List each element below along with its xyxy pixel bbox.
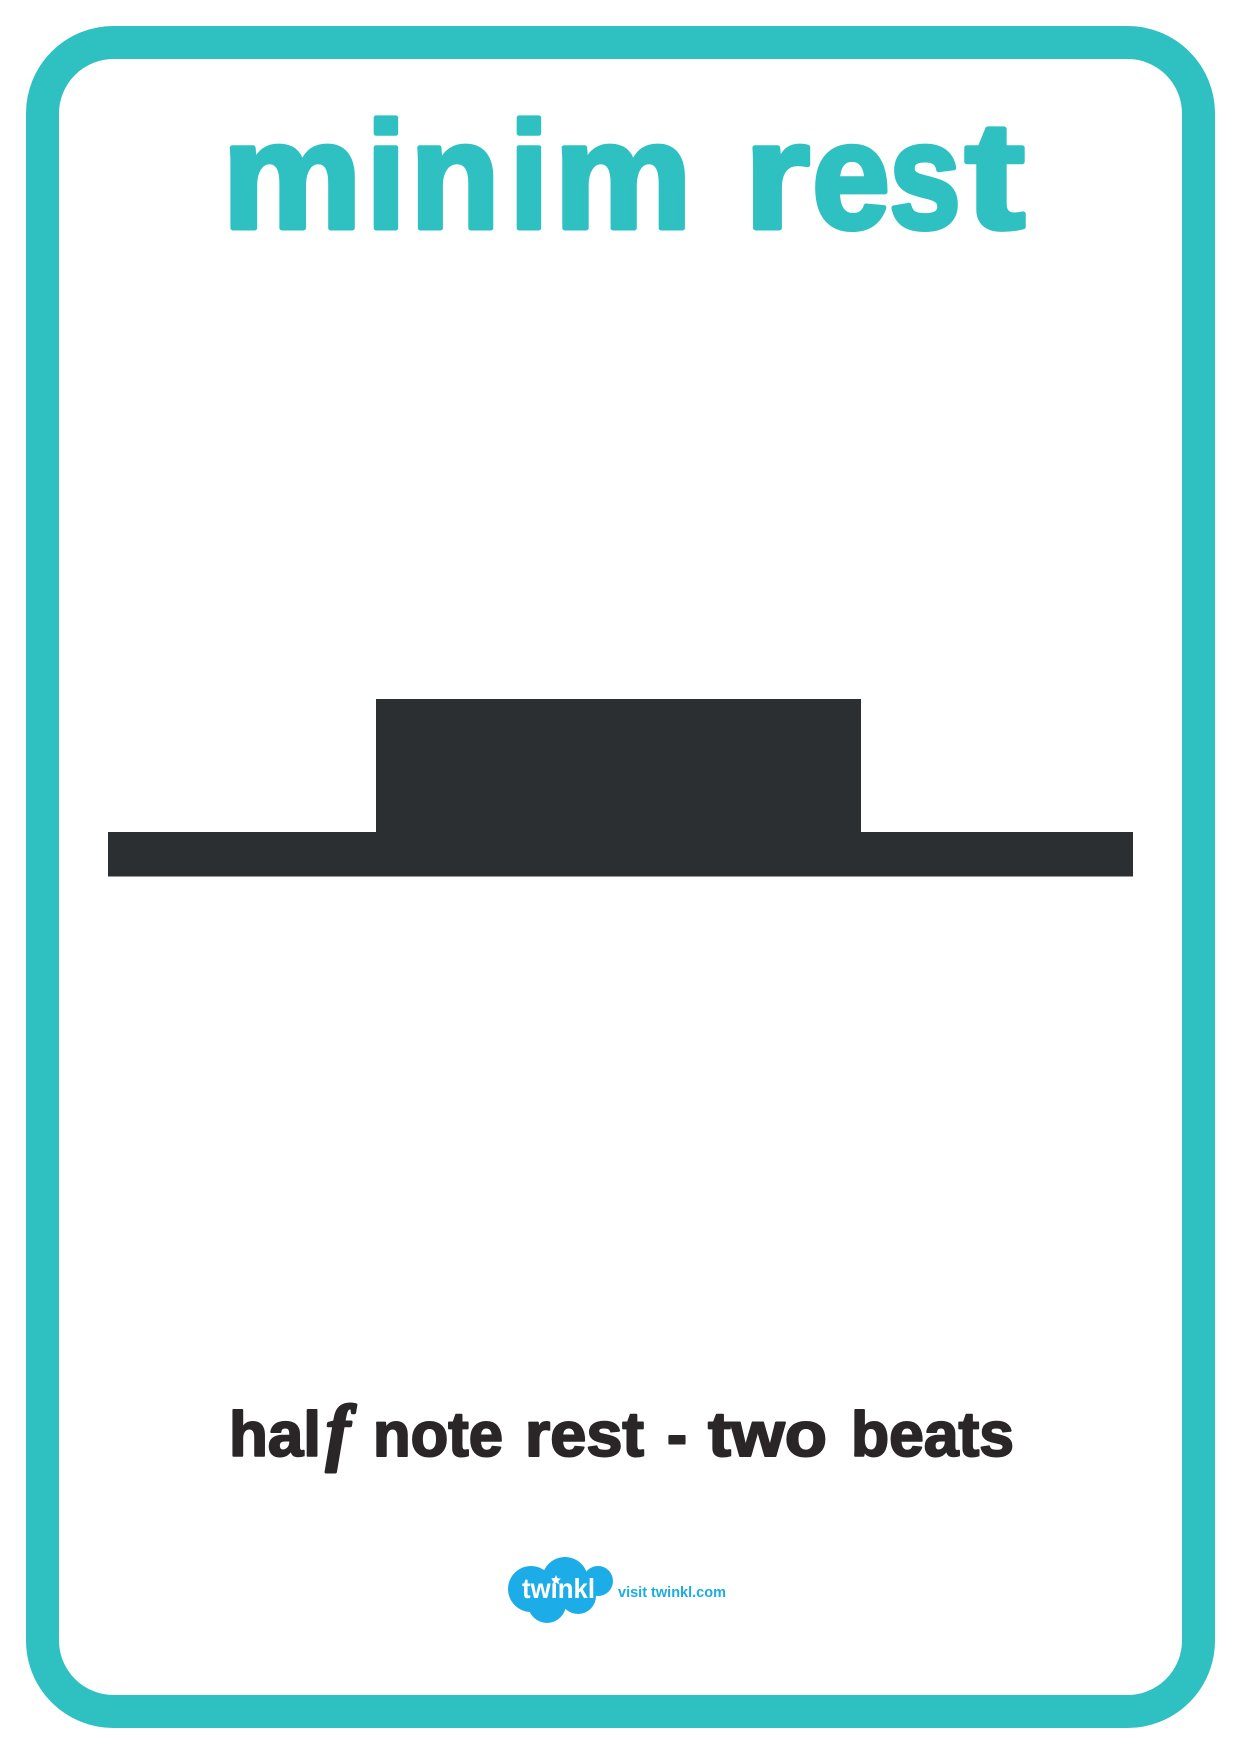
icon: minim rest symbol xyxy=(108,699,1133,876)
title: i xyxy=(509,91,549,261)
title: n xyxy=(410,91,500,261)
title: s xyxy=(889,91,961,261)
logo: twinkl xyxy=(508,1557,726,1623)
caption: hal xyxy=(229,1400,321,1470)
caption: two xyxy=(708,1400,827,1470)
caption: rest xyxy=(525,1400,644,1470)
caption: note xyxy=(373,1400,503,1470)
logo wordmark: twinkl xyxy=(522,1573,595,1604)
website link: visit twinkl.com xyxy=(618,1584,726,1601)
title: m xyxy=(554,91,692,261)
icon: star xyxy=(551,1575,561,1584)
icon: cloud xyxy=(508,1557,613,1623)
title: m xyxy=(222,91,362,261)
caption: beats xyxy=(851,1400,1014,1470)
caption: f xyxy=(326,1391,356,1473)
caption: - xyxy=(667,1400,687,1470)
title: i xyxy=(366,91,406,261)
title: e xyxy=(812,91,890,261)
title: t xyxy=(965,91,1025,261)
title: r xyxy=(744,91,810,261)
